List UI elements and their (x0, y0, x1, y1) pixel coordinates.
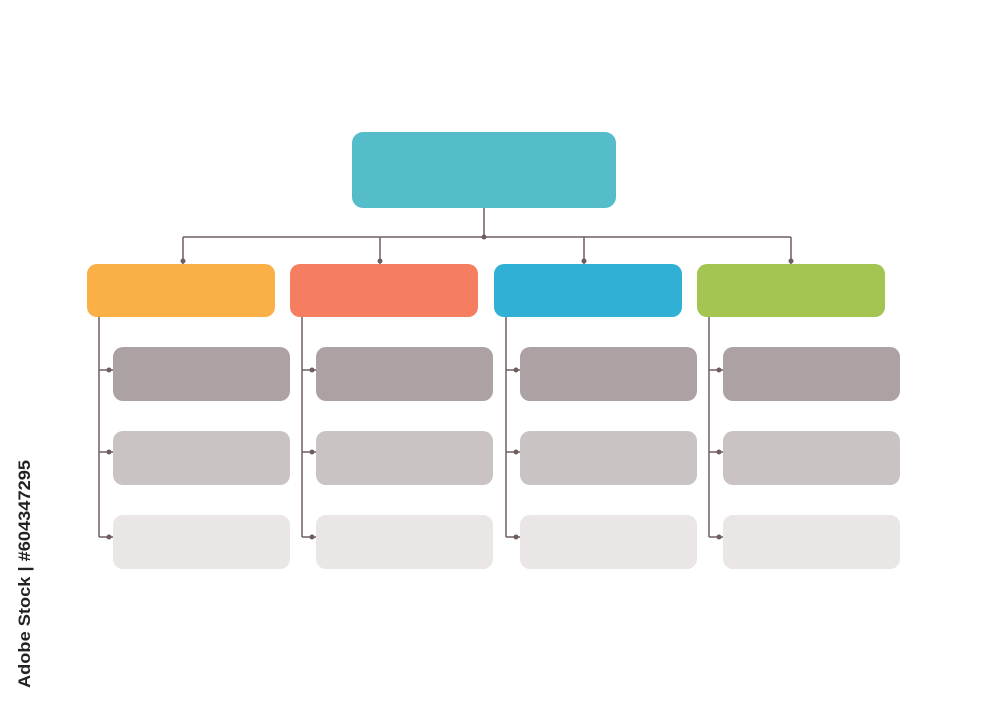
top box (352, 132, 616, 208)
connectors: top to level 2 (183, 208, 791, 264)
level 2 box: orange (87, 264, 275, 317)
connector dots top (180, 234, 794, 264)
column 3 items (520, 347, 697, 569)
watermark text: Adobe Stock | #604347295 (15, 460, 34, 688)
branch connectors (99, 317, 723, 537)
level 2 box: blue (494, 264, 682, 317)
column 2 items (316, 347, 493, 569)
column 1 items (113, 347, 290, 569)
level 2 box: green (697, 264, 885, 317)
level 2 box: red (290, 264, 478, 317)
column 4 items (723, 347, 900, 569)
branch dots (106, 368, 722, 540)
